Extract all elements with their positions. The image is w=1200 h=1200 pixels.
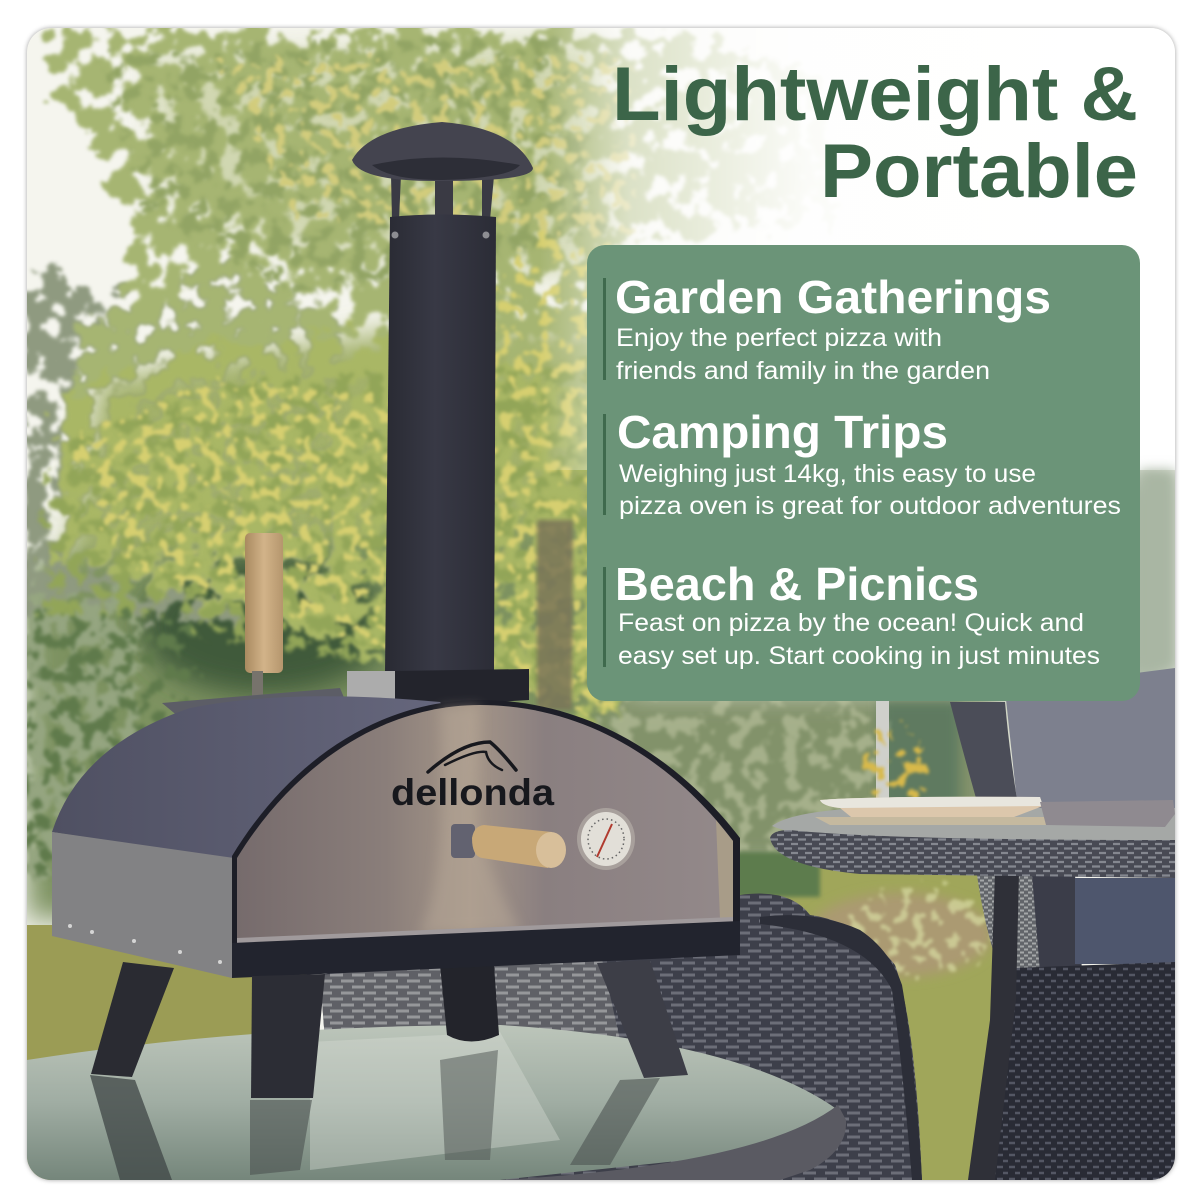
chimney flue	[385, 214, 496, 672]
faint right treetop	[1140, 470, 1175, 670]
table glass top	[772, 808, 1175, 842]
white text fade	[540, 28, 1175, 470]
rear vent ledge	[162, 688, 344, 714]
thermometer	[577, 808, 635, 870]
section: beach and picnics: easy set up. Start cooking in just minutes	[618, 642, 1100, 670]
title: Portable	[820, 129, 1138, 214]
patio chair and table at right	[770, 668, 1175, 1180]
section: camping trips	[603, 406, 1121, 520]
wicker armchair behind oven	[320, 894, 922, 1180]
chair arm	[1032, 875, 1082, 972]
door arch	[232, 700, 740, 945]
soft canopy underpainting	[60, 40, 620, 640]
oven side panel	[52, 832, 234, 978]
tree canopy	[45, 30, 840, 720]
logo wave	[428, 742, 516, 772]
back leg	[440, 965, 499, 1042]
title: Lightweight &	[612, 52, 1138, 137]
door sheen	[420, 706, 520, 934]
logo text: dellonda	[391, 772, 554, 813]
flue collar	[347, 669, 529, 704]
chair wicker back	[950, 702, 1016, 797]
plate	[820, 796, 1042, 817]
flower bed	[808, 893, 992, 977]
pizza oven	[52, 122, 740, 1098]
section: camping trips: pizza oven is great for outdoor adventures	[619, 492, 1121, 520]
table leg	[968, 872, 1019, 1180]
section: beach and picnics	[603, 558, 1100, 670]
distant and lower trees	[27, 470, 1175, 920]
right leg	[597, 960, 688, 1078]
section: garden gatherings: Enjoy the perfect pizza with	[616, 324, 942, 352]
section: beach and picnics: Feast on pizza by the ocean! Quick and	[618, 609, 1084, 637]
base front	[232, 921, 740, 978]
yellow sunlit leaves	[70, 60, 640, 720]
panel: uses	[587, 245, 1140, 701]
title	[612, 52, 1138, 214]
table wicker rim	[770, 830, 1175, 878]
chair seat cushion	[1075, 878, 1175, 964]
section: garden gatherings: friends and family in the garden	[616, 357, 990, 385]
door right edge	[716, 820, 733, 919]
yellow shrub	[866, 726, 934, 814]
front left leg	[251, 974, 325, 1098]
place mat	[815, 817, 1046, 825]
foreground garden foliage right	[600, 700, 880, 860]
side temperature probe	[245, 533, 283, 699]
chimney cap	[352, 122, 533, 220]
left grey-green treeline	[27, 260, 340, 880]
steel door	[237, 705, 733, 942]
section: beach and picnics: Beach & Picnics	[615, 558, 979, 610]
oven dome side	[52, 696, 441, 858]
pole	[876, 701, 889, 798]
wicker seat	[985, 962, 1175, 1180]
lower dense foliage	[27, 40, 600, 880]
door bottom strip	[237, 917, 733, 944]
tree trunk	[537, 520, 573, 710]
glass table	[27, 1025, 846, 1180]
section: garden gatherings: Garden Gatherings	[615, 271, 1051, 323]
section: garden gatherings	[603, 271, 1051, 385]
lawn	[27, 925, 330, 1180]
rear left leg	[91, 962, 174, 1077]
section: camping trips: Camping Trips	[617, 406, 948, 458]
menu	[1040, 800, 1175, 827]
section: camping trips: Weighing just 14kg, this easy to use	[619, 460, 1036, 488]
door handle	[451, 824, 566, 868]
lower chair weave	[977, 876, 1040, 968]
chair back cushion	[1006, 668, 1175, 808]
